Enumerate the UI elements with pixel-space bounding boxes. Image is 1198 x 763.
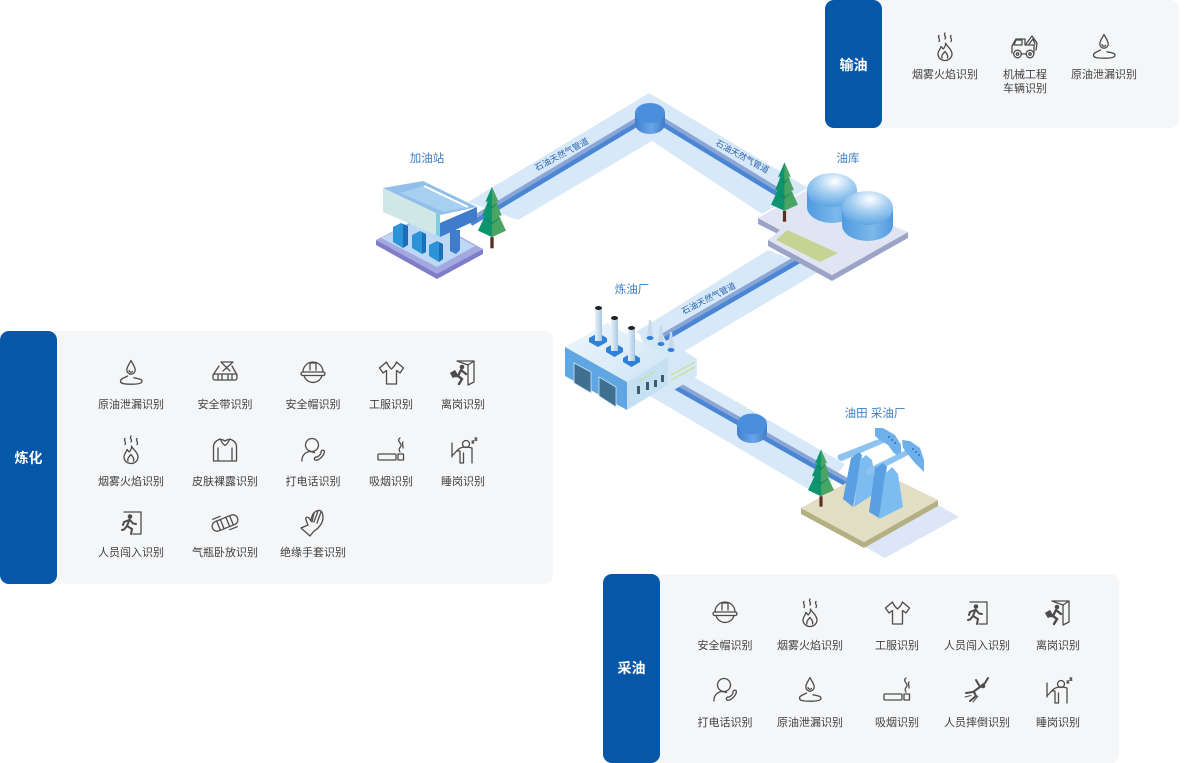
scene: oil and gas pipeline network — [376, 93, 959, 558]
pipeline band: gas station to depot — [468, 93, 808, 220]
facility: gas station — [376, 181, 483, 279]
tree: oil depot — [771, 162, 798, 222]
tank 1 — [807, 173, 857, 223]
facility: refinery — [565, 306, 697, 410]
label: oil field: 油田 采油厂 — [845, 406, 905, 420]
heading tab: 炼化: 炼化 — [14, 450, 42, 466]
tree: gas station — [478, 187, 506, 248]
canopy top — [383, 181, 477, 215]
item: 安全带识别 — [198, 362, 252, 411]
item: 吸烟识别: 吸烟识别 — [875, 715, 919, 729]
item: 工服识别 — [875, 602, 919, 652]
pipe label: refinery to depot: 石油天然气管道 — [680, 280, 738, 316]
item: 工服识别: 工服识别 — [369, 398, 413, 411]
panel: 采油 — [603, 574, 1119, 763]
item: 原油泄漏识别: 原油泄漏识别 — [98, 397, 164, 411]
item: 人员摔倒识别: 人员摔倒识别 — [944, 715, 1010, 729]
item: 原油泄漏识别: 原油泄漏识别 — [777, 715, 843, 729]
item: 烟雾火焰识别 — [98, 436, 164, 488]
ground shadow — [865, 505, 959, 558]
item: 机械工程车辆识别: 机械工程 — [1003, 67, 1047, 81]
item: 离岗识别 — [441, 361, 485, 411]
item: 气瓶卧放识别 — [192, 511, 258, 559]
pipe: refinery to oil field — [671, 383, 850, 486]
item: 人员闯入识别: 人员闯入识别 — [98, 545, 164, 559]
item: 睡岗识别: 睡岗识别 — [441, 475, 485, 488]
canopy pillar — [450, 230, 460, 254]
pipe: junction to depot — [659, 120, 778, 194]
item: 打电话识别: 打电话识别 — [698, 715, 752, 729]
label: gas station: 加油站 — [410, 151, 445, 165]
item: 打电话识别 — [286, 438, 340, 488]
roof — [565, 323, 668, 382]
loading area — [776, 230, 838, 262]
item: 安全帽识别: 安全帽识别 — [286, 397, 340, 411]
pumps — [393, 223, 443, 262]
item: 离岗识别 — [1036, 601, 1080, 652]
panel: 输油 — [825, 0, 1179, 128]
label: refinery: 炼油厂 — [615, 282, 649, 296]
heading tab: 输油: 输油 — [840, 57, 868, 73]
item: 绝缘手套识别 — [280, 510, 346, 559]
item: 原油泄漏识别 — [98, 360, 164, 411]
item: 机械工程车辆识别 — [1003, 36, 1047, 95]
panel: 炼化 — [0, 331, 553, 584]
label: oil depot: 油库 — [836, 151, 860, 165]
item: 原油泄漏识别 — [777, 678, 843, 729]
pipe: refinery to depot — [664, 258, 801, 339]
pipe label: left upper: 石油天然气管道 — [533, 136, 591, 173]
pipeline band: refinery to depot — [636, 250, 820, 352]
left wall — [565, 347, 627, 410]
canopy side — [440, 207, 477, 237]
item: 睡岗识别 — [441, 438, 485, 488]
item: 安全帽识别 — [698, 602, 752, 652]
small stacks — [646, 320, 674, 352]
item: 原油泄漏识别: 原油泄漏识别 — [1071, 67, 1137, 81]
item: 皮肤裸露识别: 皮肤裸露识别 — [192, 474, 258, 488]
item: 离岗识别: 离岗识别 — [441, 397, 485, 411]
item: 安全带识别: 安全带识别 — [198, 397, 252, 411]
item: 吸烟识别 — [369, 438, 413, 488]
item: 烟雾火焰识别 — [777, 599, 843, 652]
heading tab: 采油 — [603, 574, 660, 763]
item: 工服识别 — [369, 362, 413, 411]
doors — [574, 363, 616, 407]
item: 吸烟识别 — [875, 678, 919, 729]
item: 人员闯入识别 — [944, 602, 1010, 652]
facility: oil depot — [758, 173, 908, 281]
item: 安全帽识别: 安全帽识别 — [698, 638, 752, 652]
pipeline band: refinery to oil field — [650, 368, 845, 496]
item: 原油泄漏识别 — [1071, 34, 1137, 81]
item: 打电话识别 — [698, 678, 752, 729]
junction valve: upper — [635, 103, 665, 134]
pipe label: right upper: 石油天然气管道 — [714, 138, 771, 175]
tree: oil field — [808, 449, 834, 507]
pump jack: rear — [838, 428, 901, 507]
item: 烟雾火焰识别 — [912, 33, 978, 81]
item: 人员闯入识别: 人员闯入识别 — [944, 638, 1010, 652]
item: 睡岗识别 — [1036, 678, 1080, 729]
pipe: gas station to junction — [470, 120, 641, 224]
item: 工服识别: 工服识别 — [875, 639, 919, 652]
heading tab: 采油: 采油 — [618, 660, 646, 676]
facility: oil field — [801, 428, 959, 558]
junction valve: lower — [737, 414, 767, 443]
item: 烟雾火焰识别: 烟雾火焰识别 — [777, 638, 843, 652]
item: 吸烟识别: 吸烟识别 — [369, 474, 413, 488]
item: 打电话识别: 打电话识别 — [286, 474, 340, 488]
item: 安全帽识别 — [286, 362, 340, 411]
pump jack: front — [865, 440, 924, 519]
item: 睡岗识别: 睡岗识别 — [1036, 716, 1080, 729]
platform — [801, 500, 938, 548]
chimneys — [589, 306, 640, 367]
item: 绝缘手套识别: 绝缘手套识别 — [280, 545, 346, 559]
heading tab: 炼化 — [0, 331, 57, 584]
item: 人员闯入识别 — [98, 512, 164, 559]
annex — [638, 330, 697, 393]
item: 气瓶卧放识别: 气瓶卧放识别 — [192, 545, 258, 559]
item: 机械工程车辆识别: 车辆识别 — [1003, 81, 1047, 95]
item: 烟雾火焰识别: 烟雾火焰识别 — [912, 67, 978, 81]
windows — [637, 375, 664, 394]
right wall — [627, 357, 668, 410]
item: 离岗识别: 离岗识别 — [1036, 638, 1080, 652]
heading tab: 输油 — [825, 0, 882, 128]
item: 皮肤裸露识别 — [192, 439, 258, 488]
item: 烟雾火焰识别: 烟雾火焰识别 — [98, 474, 164, 488]
tank 2 — [842, 191, 893, 241]
item: 人员摔倒识别 — [944, 678, 1010, 729]
canopy front — [383, 188, 440, 237]
